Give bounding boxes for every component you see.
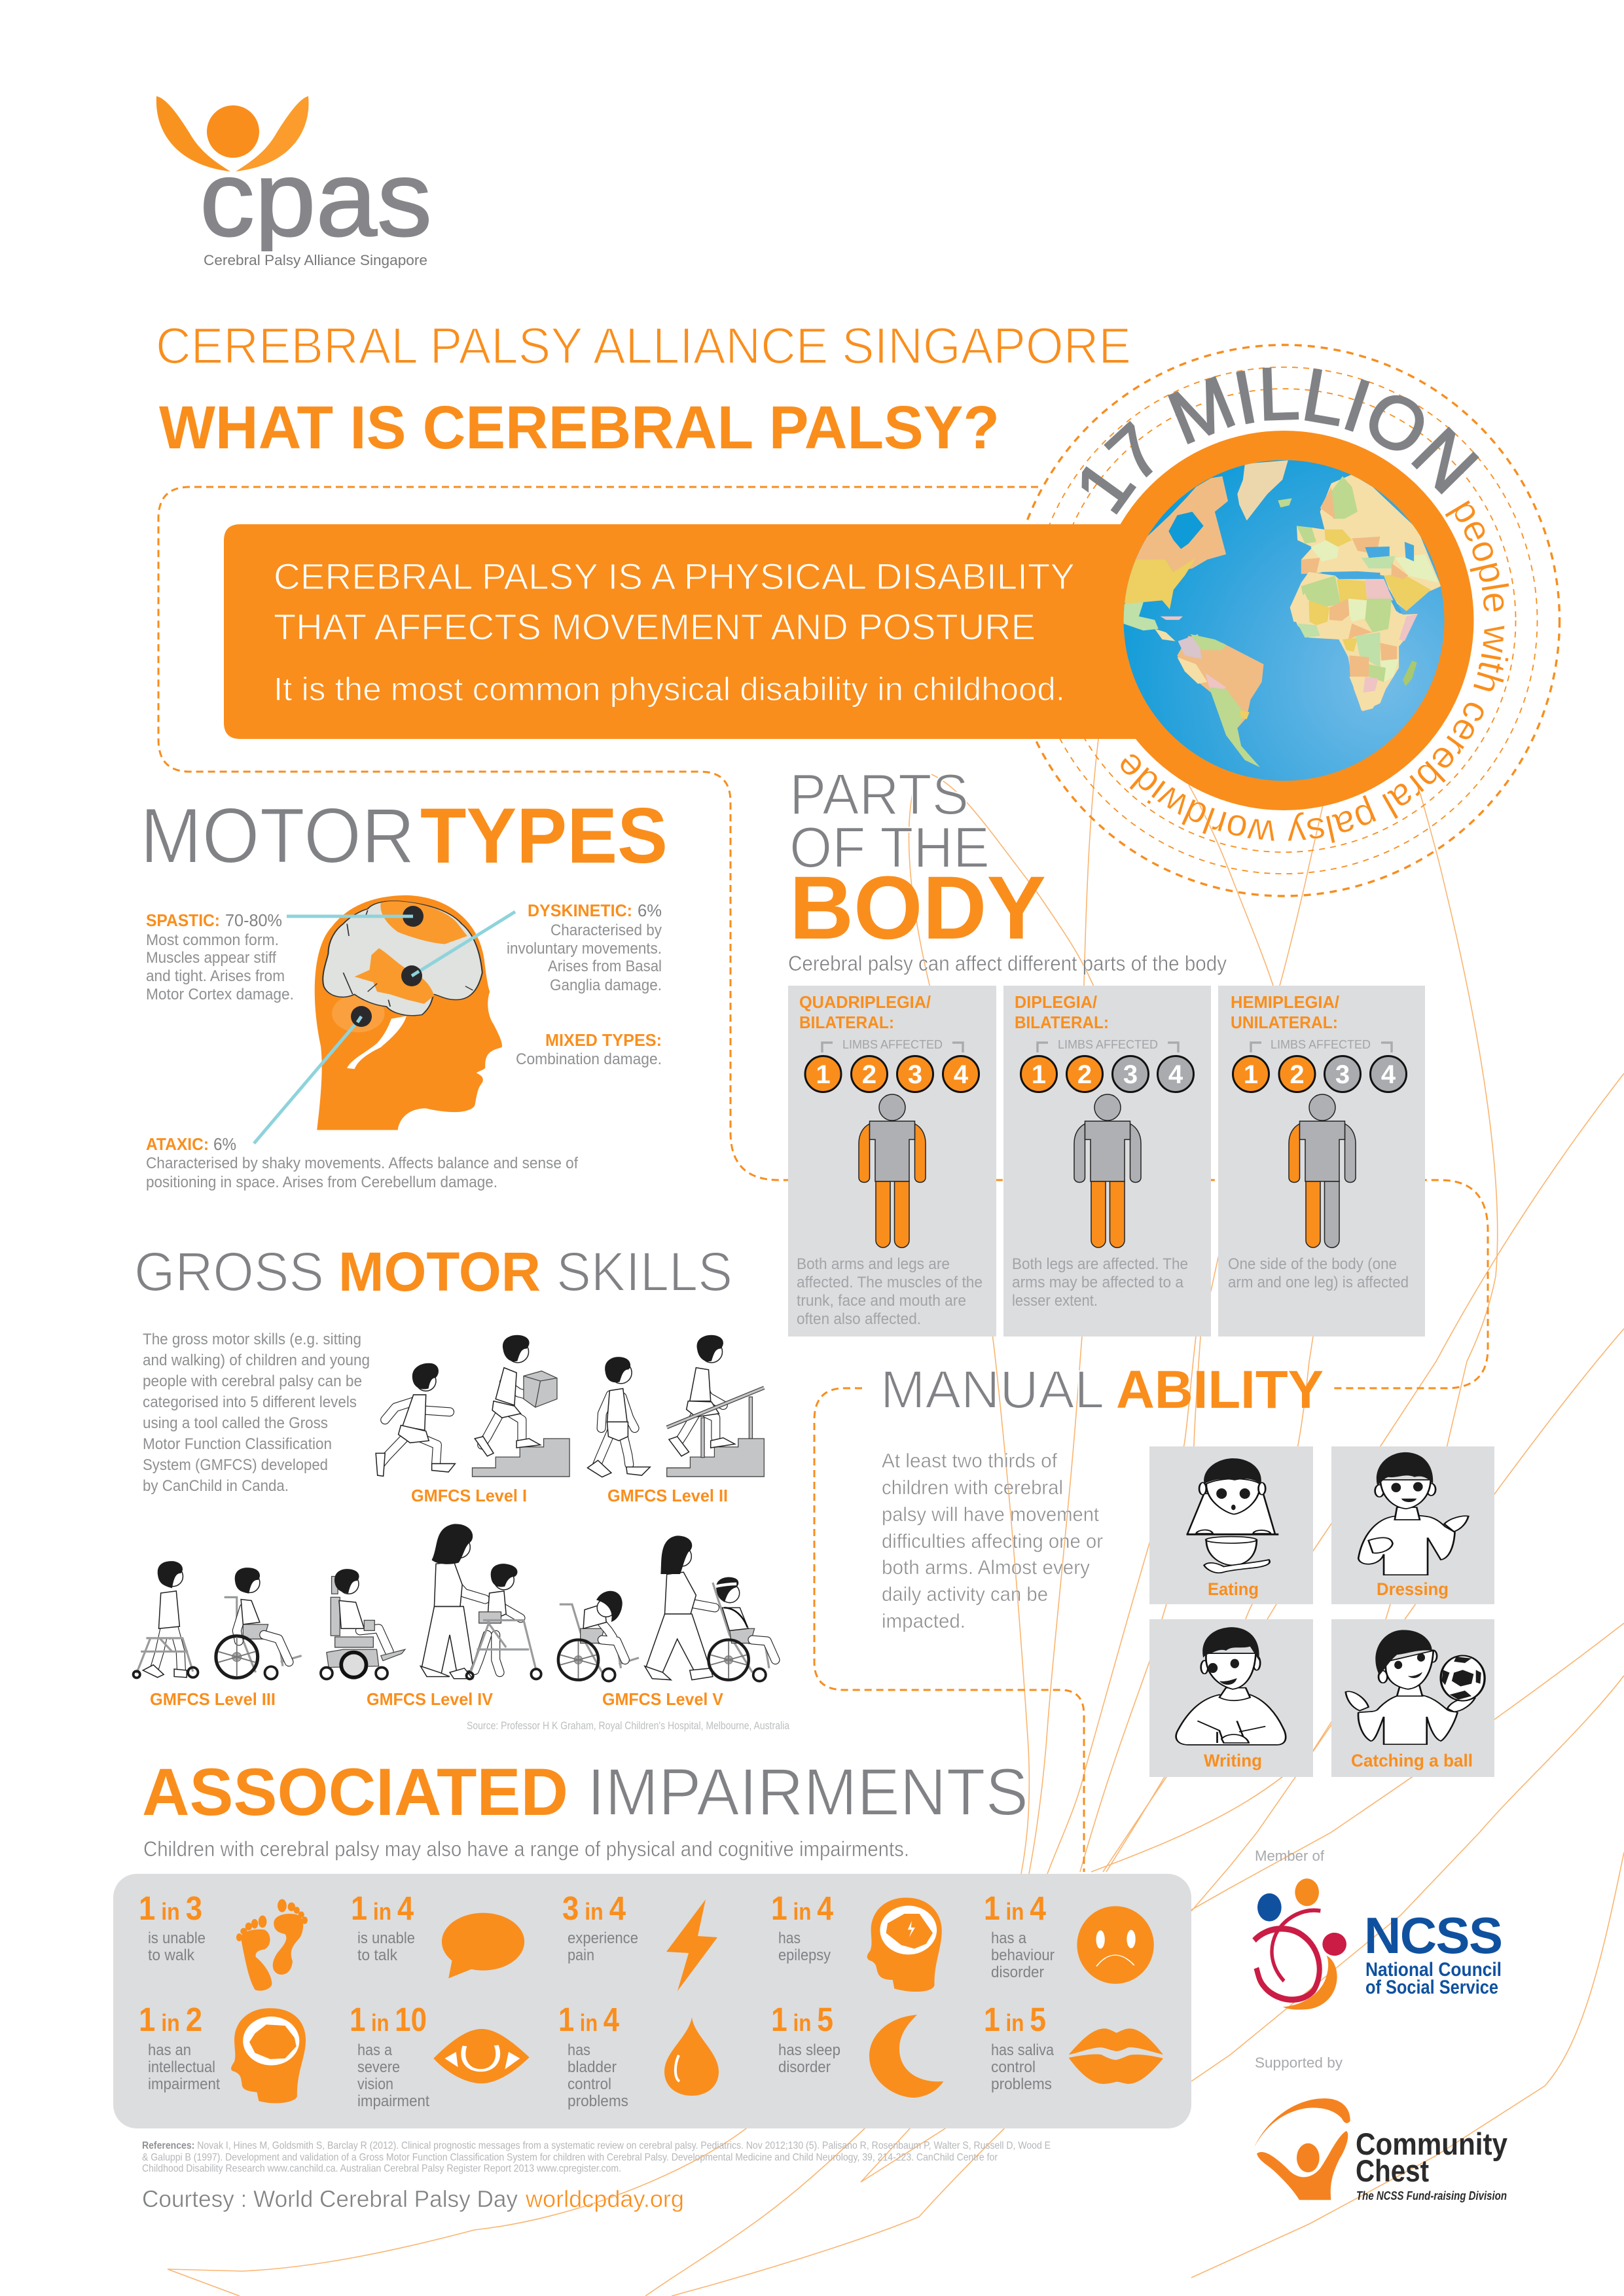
stat: 1 in 2 intellectual impairment: intellectual xyxy=(148,2058,215,2076)
stat: 1 in 4 unable to talk: to talk xyxy=(357,1946,398,1964)
subtitle: Children with cerebral palsy may also have a range of physical and cognitive impairments. xyxy=(143,1837,909,1861)
logo: NCSS: National Council xyxy=(1365,1959,1502,1981)
limb counters: 1 xyxy=(816,1060,831,1089)
text: dyskinetic: Characterised by xyxy=(550,922,662,939)
icon: head with brain xyxy=(231,2008,306,2103)
icon: body figure legs xyxy=(1074,1094,1141,1247)
stat: 1 in 4 bladder control: bladder xyxy=(568,2058,617,2076)
text: gross motor description: categorised into 5 different levels xyxy=(143,1393,357,1411)
stat: 1 in 4 unable to talk: is unable xyxy=(357,1929,415,1947)
source note: Source: Professor H K Graham, Royal Children's Hospital, Melbourne, Australia xyxy=(467,1720,790,1732)
limb counters: 2 xyxy=(1077,1060,1092,1089)
title: what is cerebral palsy: WHAT IS CEREBRAL PALSY? xyxy=(159,393,1000,461)
stat: 1 in 4 behaviour disorder: behaviour xyxy=(991,1946,1055,1964)
stat: 1 in 3 unable to walk: to walk xyxy=(148,1946,195,1964)
card: diplegia: LIMBS AFFECTED xyxy=(1058,1038,1158,1051)
stat: 1 in 4 bladder control: control xyxy=(568,2075,611,2093)
heading: associated impairments: ASSOCIATED xyxy=(142,1755,568,1829)
stat: 1 in 2 intellectual impairment xyxy=(139,2001,306,2103)
card: eating: Eating xyxy=(1208,1579,1259,1599)
references: References: Novak I, Hines M, Goldsmith S, Barclay R (2012). Clinical prognostic messages from a systematic review on cerebral palsy. Pediatrics. Nov 2012;130 (5). Palisano R, Rosenbaum P, Walter S, Russell D, Wood E xyxy=(142,2140,1051,2151)
references: & Galuppi B (1997). Development and validation of a Gross Motor Function Classification System for children with Cerebral Palsy. Developmental Medicine and Child Neurology, 39, 214-223. CanChild Centre for xyxy=(142,2152,998,2163)
icon: boy dressing xyxy=(1358,1452,1468,1575)
text: gross motor description: Motor Function Classification xyxy=(143,1435,332,1453)
text: spastic: SPASTIC: xyxy=(146,910,220,930)
text: gross motor description: using a tool called the Gross xyxy=(143,1414,328,1432)
panel: gross motor skills xyxy=(134,1241,790,1732)
figure: level III child with walker xyxy=(134,1562,198,1677)
title: organisation name: CEREBRAL PALSY ALLIANCE SINGAPORE xyxy=(156,317,1131,374)
label: supported by: Supported by xyxy=(1255,2054,1343,2071)
heading: manual ability xyxy=(880,1360,1324,1420)
card: writing xyxy=(1149,1619,1313,1777)
icon: world globe xyxy=(1094,431,1474,810)
text: manual ability description: At least two thirds of xyxy=(882,1449,1057,1472)
text: spastic: Motor Cortex damage. xyxy=(146,986,294,1003)
limb counters xyxy=(1021,1056,1194,1092)
labels: GMFCS levels: GMFCS Level III xyxy=(150,1689,276,1709)
heading: gross motor skills: GROSS xyxy=(134,1241,324,1302)
figure: level III child in wheelchair xyxy=(216,1569,302,1679)
stat: 1 in 5 saliva control: 1 in 5 xyxy=(984,2001,1046,2038)
limb counters: 1 xyxy=(1244,1060,1258,1089)
heading: parts of the body: OF THE xyxy=(789,815,990,880)
icon: body figure one side xyxy=(1289,1094,1356,1247)
card: hemiplegia: LIMBS AFFECTED xyxy=(1271,1038,1371,1051)
card: catching a ball: Catching a ball xyxy=(1351,1751,1473,1770)
stat: 1 in 4 bladder control: problems xyxy=(568,2092,628,2110)
figure: level IV adult and child with walker xyxy=(420,1525,541,1679)
text: manual ability description: impacted. xyxy=(882,1609,965,1632)
logo: Community Chest xyxy=(1254,2098,1507,2202)
stat: 1 in 5 saliva control: problems xyxy=(991,2075,1052,2093)
text: spastic: 70-80% xyxy=(225,910,282,930)
limb counters: 3 xyxy=(1123,1060,1138,1089)
card: dressing xyxy=(1331,1446,1494,1604)
text: gross motor description: people with cerebral palsy can be xyxy=(143,1372,362,1390)
stat: 1 in 3 unable to walk: is unable xyxy=(148,1929,206,1947)
labels: GMFCS levels: GMFCS Level I xyxy=(411,1486,527,1505)
text: manual ability description: children with cerebral xyxy=(882,1476,1063,1499)
heading: motor types: TYPES xyxy=(420,792,668,880)
text: gross motor description xyxy=(143,1331,370,1495)
card: quadriplegia: BILATERAL: xyxy=(799,1013,894,1032)
limb counters xyxy=(805,1056,979,1092)
icon: body figure all limbs xyxy=(859,1094,926,1247)
courtesy line: Courtesy : World Cerebral Palsy Day xyxy=(142,2185,518,2212)
stat: 1 in 5 sleep disorder xyxy=(771,2001,943,2098)
stat: 1 in 4 unable to talk xyxy=(351,1890,524,1979)
card: writing: Writing xyxy=(1204,1751,1262,1770)
panel: definition banner: It is the most common physical disability in childhood. xyxy=(274,671,1065,708)
text: dyskinetic: 6% xyxy=(638,901,662,920)
stat: 1 in 2 intellectual impairment: 1 in 2 xyxy=(139,2001,202,2038)
heading: gross motor skills: SKILLS xyxy=(556,1241,732,1302)
text: manual ability description: difficulties affecting one or xyxy=(882,1530,1103,1552)
logo: Community Chest: Community xyxy=(1356,2126,1507,2161)
stat: 1 in 4 unable to talk: 1 in 4 xyxy=(351,1890,414,1927)
figure: level V child in chair xyxy=(708,1578,776,1681)
card: hemiplegia: UNILATERAL: xyxy=(1231,1013,1338,1032)
stat: 1 in 10 vision impairment: vision xyxy=(357,2075,393,2093)
panel: definition banner: CEREBRAL PALSY IS A PHYSICAL DISABILITY xyxy=(274,556,1075,597)
caption: people with cerebral palsy worldwide: people with cerebral palsy worldwide xyxy=(1121,500,1509,843)
text: manual ability description: palsy will have movement xyxy=(882,1503,1099,1526)
stat: 1 in 5 sleep disorder: disorder xyxy=(778,2058,831,2076)
panel: definition banner: THAT AFFECTS MOVEMENT AND POSTURE xyxy=(274,606,1036,647)
heading: gross motor skills: MOTOR xyxy=(338,1241,541,1302)
card: diplegia: Both legs are affected. The xyxy=(1012,1255,1188,1273)
stat: 1 in 5 saliva control xyxy=(984,2001,1163,2093)
heading: manual ability: MANUAL xyxy=(880,1360,1104,1420)
illustrations: GMFCS figures xyxy=(134,1336,776,1681)
card: diplegia xyxy=(1003,986,1211,1336)
stat: 1 in 4 epilepsy: has xyxy=(778,1929,801,1947)
icon: water drop xyxy=(664,2017,719,2096)
labels: GMFCS levels: GMFCS Level II xyxy=(607,1486,728,1505)
stat: 1 in 5 saliva control: has saliva xyxy=(991,2041,1055,2059)
text: spastic xyxy=(146,910,294,1003)
stat: 1 in 10 vision impairment: 1 in 10 xyxy=(350,2001,427,2038)
limb counters: 4 xyxy=(1168,1060,1183,1089)
card: quadriplegia: trunk, face and mouth are xyxy=(797,1292,966,1310)
headline: 17 million: 17 MILLION xyxy=(1081,368,1479,514)
text: manual ability description xyxy=(882,1449,1103,1632)
limb counters: 4 xyxy=(1381,1060,1396,1089)
globe dashed rings xyxy=(1008,345,1559,896)
card: diplegia: lesser extent. xyxy=(1012,1292,1098,1310)
icon: sad face xyxy=(1077,1906,1154,1984)
card: eating xyxy=(1149,1446,1313,1604)
text: gross motor description: The gross motor skills (e.g. sitting xyxy=(143,1331,361,1348)
card: quadriplegia: often also affected. xyxy=(797,1310,921,1328)
figure: level IV child in power chair xyxy=(321,1570,405,1679)
panel: associated impairments xyxy=(113,1755,1191,2128)
card: dressing: Dressing xyxy=(1377,1579,1449,1599)
limb counters: 2 xyxy=(1290,1060,1305,1089)
stat: 1 in 4 behaviour disorder: has a xyxy=(991,1929,1027,1947)
card: quadriplegia: LIMBS AFFECTED xyxy=(842,1038,943,1051)
text: gross motor description: and walking) of children and young xyxy=(143,1352,370,1369)
card: hemiplegia xyxy=(1218,986,1425,1336)
labels: GMFCS levels xyxy=(150,1486,728,1709)
card: quadriplegia xyxy=(788,986,996,1336)
icon: head and brain diagram xyxy=(254,895,515,1143)
card: hemiplegia: HEMIPLEGIA/ xyxy=(1231,992,1339,1012)
references: Childhood Disability Research www.canchild.ca. Australian Cerebral Palsy Register Report 2013 www.cpregister.com. xyxy=(142,2163,621,2174)
stats background panel xyxy=(113,1874,1191,2128)
text: gross motor description: System (GMFCS) developed xyxy=(143,1456,328,1474)
card: hemiplegia: One side of the body (one xyxy=(1228,1255,1397,1273)
text: manual ability description: both arms. Almost every xyxy=(882,1556,1090,1579)
stat: 1 in 10 vision impairment: impairment xyxy=(357,2092,429,2110)
card: diplegia: DIPLEGIA/ xyxy=(1015,992,1097,1012)
stat: 1 in 10 vision impairment xyxy=(350,2001,530,2110)
icon: boy with ball xyxy=(1346,1630,1485,1744)
icon: lips xyxy=(1069,2028,1163,2084)
card: quadriplegia: QUADRIPLEGIA/ xyxy=(799,992,931,1012)
panel: parts of the body xyxy=(788,762,1425,1336)
references xyxy=(142,2140,1051,2174)
logo: Community Chest: Chest xyxy=(1356,2153,1429,2188)
courtesy line: worldcpday.org xyxy=(525,2185,684,2212)
heading: gross motor skills xyxy=(134,1241,732,1302)
icon: lightning bolt xyxy=(666,1899,717,1991)
figure: level II child on stairs with rail xyxy=(667,1336,764,1477)
limb counters: 3 xyxy=(1335,1060,1350,1089)
figure: level I running child xyxy=(376,1364,455,1476)
text: ataxic: positioning in space. Arises from Cerebellum damage. xyxy=(146,1174,497,1191)
stat: 1 in 4 epilepsy: 1 in 4 xyxy=(771,1890,834,1927)
stat: 3 in 4 pain: 3 in 4 xyxy=(562,1890,626,1927)
stat: 1 in 5 sleep disorder: 1 in 5 xyxy=(771,2001,833,2038)
stat: 3 in 4 pain: experience xyxy=(568,1929,638,1947)
text: ataxic: ATAXIC: xyxy=(146,1134,209,1154)
limb counters: 2 xyxy=(862,1060,876,1089)
heading: associated impairments: IMPAIRMENTS xyxy=(587,1755,1028,1829)
icon: speech bubble xyxy=(442,1913,524,1979)
labels: GMFCS levels: GMFCS Level IV xyxy=(367,1689,494,1709)
figure: level V adult pushing child xyxy=(645,1537,715,1680)
limb counters xyxy=(1233,1056,1406,1092)
stat: 1 in 4 epilepsy xyxy=(771,1890,942,1992)
logo: Community Chest: The NCSS Fund-raising Division xyxy=(1356,2189,1507,2202)
limb counters: 4 xyxy=(954,1060,969,1089)
stat: 1 in 4 bladder control: 1 in 4 xyxy=(558,2001,620,2038)
text: gross motor description: by CanChild in Canda. xyxy=(143,1477,289,1495)
icon: eye xyxy=(433,2029,530,2083)
stat: 1 in 5 sleep disorder: has sleep xyxy=(778,2041,840,2059)
icon: boy eating xyxy=(1187,1458,1278,1573)
heading: parts of the body xyxy=(789,762,1046,958)
heading: associated impairments xyxy=(142,1755,1028,1829)
stat: 1 in 4 epilepsy: epilepsy xyxy=(778,1946,831,1964)
limb counters: 3 xyxy=(908,1060,922,1089)
stat: 1 in 10 vision impairment: severe xyxy=(357,2058,400,2076)
stat: 1 in 4 behaviour disorder xyxy=(984,1890,1154,1984)
limb counters: 1 xyxy=(1032,1060,1046,1089)
stat: 1 in 4 bladder control: has xyxy=(568,2041,590,2059)
text: mixed types: Combination damage. xyxy=(516,1050,662,1068)
logo: NCSS: of Social Service xyxy=(1365,1977,1498,1998)
stat: 1 in 4 bladder control xyxy=(558,2001,719,2110)
stat: 1 in 2 intellectual impairment: has an xyxy=(148,2041,191,2059)
text: ataxic: Characterised by shaky movements. Affects balance and sense of xyxy=(146,1155,578,1172)
logo: CPAS: cpas xyxy=(200,139,432,259)
stat: 1 in 10 vision impairment: has a xyxy=(357,2041,393,2059)
panel: manual ability xyxy=(880,1360,1494,1777)
text: dyskinetic: involuntary movements. xyxy=(507,940,662,958)
card: hemiplegia: arm and one leg) is affected xyxy=(1228,1274,1409,1291)
icon: crescent moon xyxy=(869,2015,943,2098)
figure: level II walking child xyxy=(588,1358,650,1477)
stat: 3 in 4 pain xyxy=(562,1890,717,1991)
logo: CPAS xyxy=(156,96,432,268)
text: dyskinetic: Arises from Basal xyxy=(548,958,662,975)
panel: motor types xyxy=(140,792,668,1191)
text: mixed types: MIXED TYPES: xyxy=(545,1030,662,1050)
logo: CPAS: Cerebral Palsy Alliance Singapore xyxy=(204,252,427,268)
heading: manual ability: ABILITY xyxy=(1116,1360,1324,1420)
heading: motor types: MOTOR xyxy=(140,792,415,880)
text: ataxic: 6% xyxy=(213,1134,236,1154)
card: diplegia: arms may be affected to a xyxy=(1012,1274,1184,1291)
stat: 1 in 3 unable to walk: 1 in 3 xyxy=(139,1890,202,1927)
text: spastic: and tight. Arises from xyxy=(146,967,285,985)
stat: 1 in 5 saliva control: control xyxy=(991,2058,1036,2076)
icon: head with seizure xyxy=(867,1897,942,1992)
card: diplegia: BILATERAL: xyxy=(1015,1013,1109,1032)
stat: 1 in 4 behaviour disorder: 1 in 4 xyxy=(984,1890,1047,1927)
card: quadriplegia: Both arms and legs are xyxy=(797,1255,950,1273)
icon: boy writing xyxy=(1176,1627,1286,1745)
label: member of: Member of xyxy=(1255,1848,1325,1864)
text: dyskinetic xyxy=(507,901,662,994)
figure: level V child bent in wheelchair xyxy=(558,1592,639,1681)
card: catching a ball xyxy=(1331,1619,1494,1777)
stat: 1 in 4 behaviour disorder: disorder xyxy=(991,1964,1044,1981)
text: spastic: Most common form. xyxy=(146,931,279,949)
text: spastic: Muscles appear stiff xyxy=(146,949,276,967)
text: mixed types xyxy=(516,1030,662,1068)
stat: 1 in 2 intellectual impairment: impairment xyxy=(148,2075,220,2093)
stat: 1 in 3 unable to walk xyxy=(139,1890,308,1991)
card: quadriplegia: affected. The muscles of the xyxy=(797,1274,983,1291)
logo: NCSS: NCSS xyxy=(1364,1907,1503,1964)
text: ataxic xyxy=(146,1134,578,1191)
subtitle: Cerebral palsy can affect different parts of the body xyxy=(788,952,1227,975)
text: manual ability description: daily activity can be xyxy=(882,1583,1048,1605)
stat: 3 in 4 pain: pain xyxy=(568,1946,594,1964)
logo: NCSS xyxy=(1254,1878,1503,2010)
heading: parts of the body: BODY xyxy=(789,858,1046,958)
heading: parts of the body: PARTS xyxy=(789,762,969,827)
text: dyskinetic: DYSKINETIC: xyxy=(528,901,632,920)
panel: definition banner xyxy=(224,524,1146,739)
icon: footprints xyxy=(236,1899,308,1991)
heading: motor types xyxy=(140,792,668,880)
figure: level I child carrying box on stairs xyxy=(472,1336,569,1477)
labels: GMFCS levels: GMFCS Level V xyxy=(602,1689,724,1709)
text: dyskinetic: Ganglia damage. xyxy=(550,977,662,994)
